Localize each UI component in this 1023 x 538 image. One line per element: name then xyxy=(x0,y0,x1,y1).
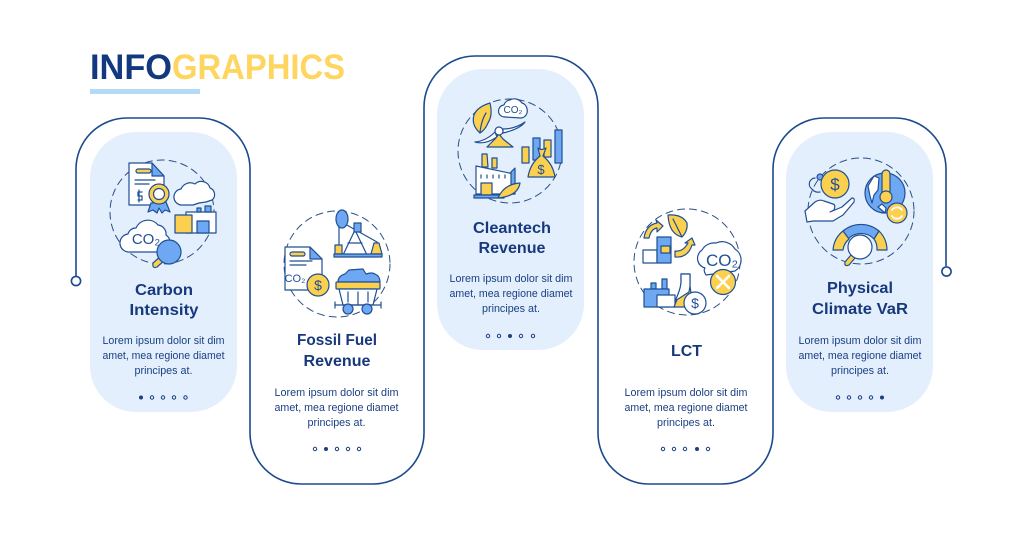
text block: fossil fuel revenue: Lorem ipsum dolor sit dim xyxy=(274,387,398,399)
text block: fossil fuel revenue xyxy=(274,387,398,429)
icon: lct: $ xyxy=(691,295,699,311)
text block: carbon intensity xyxy=(102,335,224,377)
title: INFO xyxy=(90,48,172,87)
heading: fossil fuel revenue xyxy=(297,332,377,370)
heading: fossil fuel revenue: Fossil Fuel xyxy=(297,332,377,349)
icon: physical climate var xyxy=(805,158,914,266)
icon: fossil fuel: CO₂ xyxy=(285,273,305,285)
heading: cleantech revenue: Cleantech xyxy=(473,220,551,237)
text block: carbon intensity: principes at. xyxy=(134,365,192,377)
text block: physical climate var: Lorem ipsum dolor sit dim xyxy=(798,335,922,347)
heading: physical climate var: Physical xyxy=(827,280,893,297)
icon: fossil fuel: $ xyxy=(314,277,322,293)
heading: physical climate var xyxy=(812,280,908,318)
icon: cleantech: CO₂ xyxy=(504,105,523,116)
pagination dots: physical climate var xyxy=(836,396,884,400)
heading: cleantech revenue xyxy=(473,220,551,257)
heading: physical climate var: Climate VaR xyxy=(812,301,908,318)
icon: lct: CO₂ xyxy=(706,251,738,270)
icon: lct xyxy=(634,209,741,315)
panel backgrounds xyxy=(90,69,933,412)
text block: cleantech revenue: amet, mea regione diamet xyxy=(450,288,572,300)
pagination dots: lct xyxy=(661,447,710,451)
text block: cleantech revenue: principes at. xyxy=(482,303,540,315)
text block: lct: Lorem ipsum dolor sit dim xyxy=(624,387,748,399)
icon: carbon intensity xyxy=(110,160,216,268)
pagination dots: fossil fuel revenue xyxy=(313,447,361,451)
title xyxy=(90,48,345,87)
heading: carbon intensity xyxy=(130,282,199,319)
icon: fossil fuel xyxy=(284,210,390,317)
text block: physical climate var: principes at. xyxy=(831,365,889,377)
connecting outline xyxy=(71,56,951,484)
text block: lct xyxy=(624,387,748,429)
heading: lct: LCT xyxy=(671,343,702,360)
icon: physical climate var: $ xyxy=(830,175,840,194)
title: GRAPHICS xyxy=(172,48,345,87)
text block: physical climate var: amet, mea regione diamet xyxy=(798,350,922,362)
icon: cleantech xyxy=(458,99,562,203)
text block: lct: amet, mea regione diamet xyxy=(624,402,748,414)
text block: fossil fuel revenue: amet, mea regione diamet xyxy=(274,402,398,414)
heading: fossil fuel revenue: Revenue xyxy=(304,353,371,370)
text block: carbon intensity: Lorem ipsum dolor sit dim xyxy=(102,335,224,347)
pagination dots: carbon intensity xyxy=(139,396,187,400)
heading: cleantech revenue: Revenue xyxy=(478,240,546,257)
text block: physical climate var xyxy=(798,335,922,377)
text block: fossil fuel revenue: principes at. xyxy=(308,417,366,429)
icon: cleantech: $ xyxy=(537,162,545,177)
heading: carbon intensity: Carbon xyxy=(135,282,193,299)
text block: cleantech revenue: Lorem ipsum dolor sit dim xyxy=(450,273,572,285)
text block: carbon intensity: amet, mea regione diamet xyxy=(102,350,224,362)
icon: carbon intensity: CO₂ xyxy=(132,231,160,248)
heading: carbon intensity: Intensity xyxy=(130,302,199,319)
title underline xyxy=(90,89,200,94)
pagination dots: cleantech revenue xyxy=(486,334,535,338)
text block: lct: principes at. xyxy=(657,417,715,429)
text block: cleantech revenue xyxy=(450,273,572,315)
